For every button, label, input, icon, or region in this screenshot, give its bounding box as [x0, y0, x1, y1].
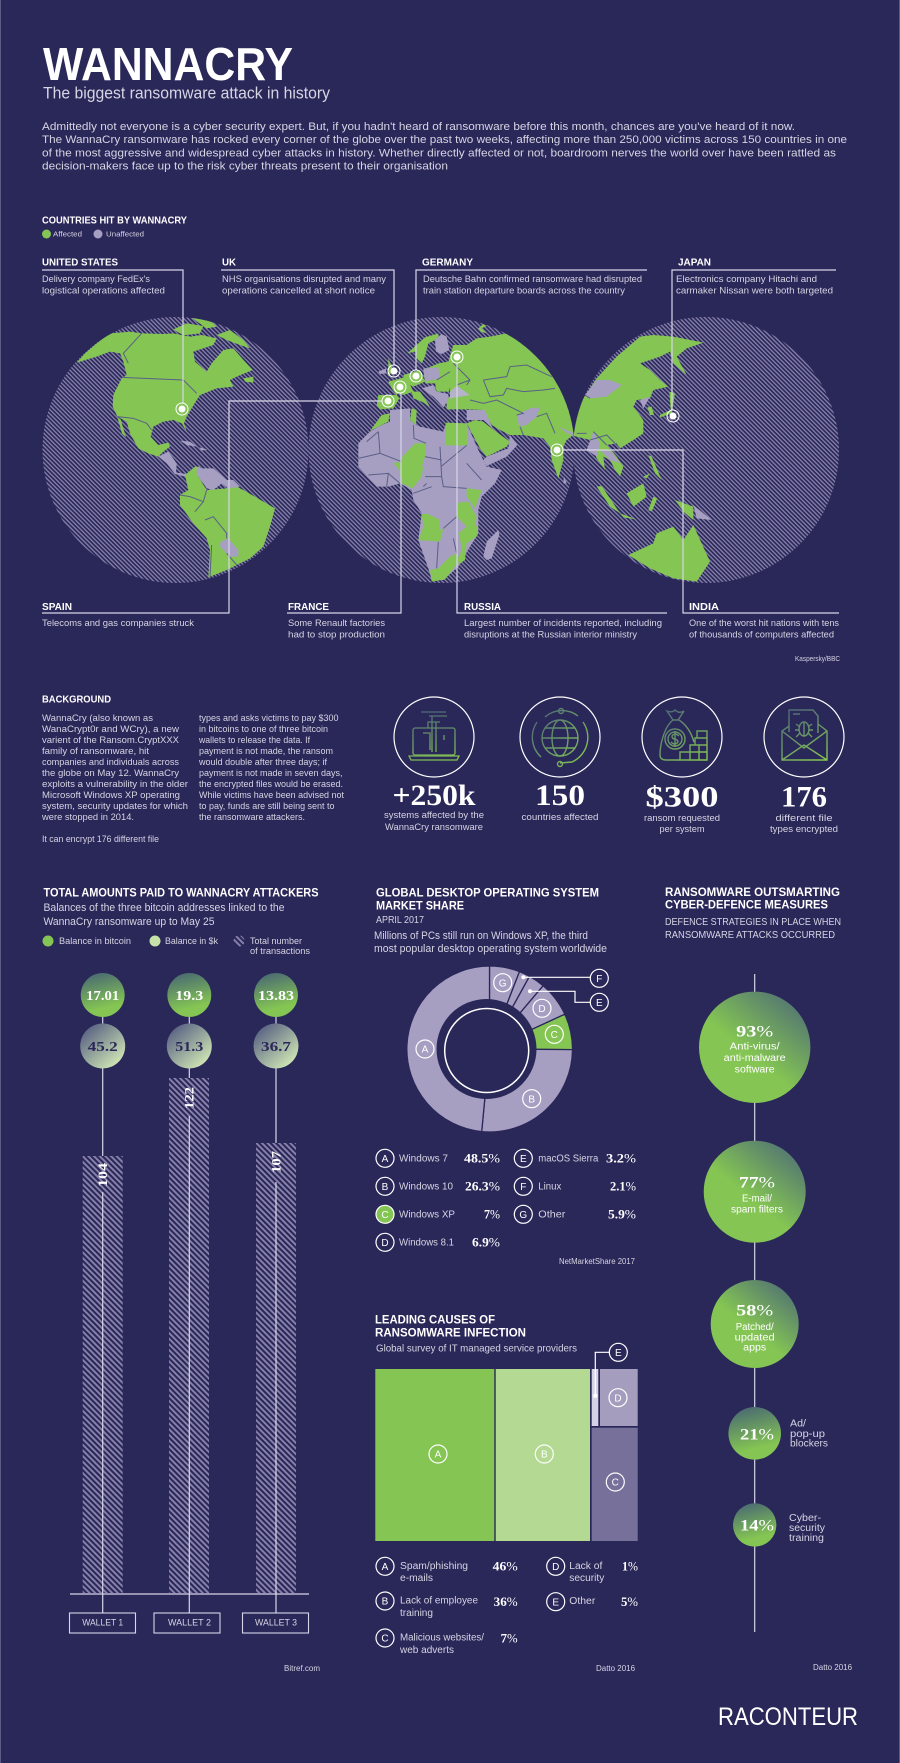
treemap chart: A	[435, 1450, 442, 1461]
donut legend: F	[520, 1182, 526, 1193]
heading: leading causes: RANSOMWARE INFECTION	[375, 1325, 526, 1339]
wallet legend: Total number	[250, 936, 302, 946]
background text column 2: While victims have been advised not	[199, 790, 344, 801]
callout: India: One of the worst hit nations with tens	[689, 618, 839, 629]
heading: OS market share: Millions of PCs still run on Windows XP, the third	[374, 930, 588, 942]
background text column 2: the ransomware attackers.	[199, 812, 305, 823]
background text column 1: Microsoft Windows XP operating	[42, 790, 180, 801]
treemap chart: D	[614, 1393, 622, 1404]
bubble: 58%	[711, 1280, 799, 1368]
chart: wallet 2: 122	[182, 1087, 197, 1109]
treemap legend: A	[382, 1562, 389, 1573]
map legend: Unaffected	[106, 230, 144, 239]
chart: wallet 3	[242, 973, 308, 1633]
intro text block: Admittedly not everyone is a cyber security expert. But, if you hadn't heard of ransomware before this month, chances are you've heard of it now.	[42, 121, 795, 133]
stat: file types: different file	[776, 813, 832, 824]
donut legend: Windows 10	[399, 1182, 453, 1192]
heading: total amounts paid: WannaCry ransomware up to May 25	[44, 916, 214, 928]
bubble: 14%: security	[789, 1523, 825, 1534]
icon: laptop	[409, 712, 459, 760]
background text column 1: family of ransomware, hit	[42, 746, 149, 757]
bubble: 77%: spam filters	[731, 1204, 783, 1216]
logo: RACONTEUR	[718, 1703, 858, 1731]
callout: Russia: RUSSIA	[464, 602, 501, 613]
bubble: 93%: 93 %	[736, 1024, 773, 1040]
donut legend: 7%	[484, 1208, 500, 1222]
donut legend: Windows 7	[399, 1154, 448, 1164]
stat: countries affected: 150	[535, 779, 585, 812]
map source: Kaspersky/BBC	[795, 654, 840, 663]
callout: Germany	[410, 258, 647, 382]
slice labels: E	[596, 998, 603, 1009]
stat: countries affected	[520, 697, 600, 823]
heading: leading causes	[375, 1312, 577, 1354]
treemap legend: D	[552, 1562, 559, 1573]
donut legend: 48.5%	[464, 1152, 500, 1166]
background text column 2: payment is not made, the ransom	[199, 746, 333, 757]
heading: outsmarting defences: DEFENCE STRATEGIES IN PLACE WHEN	[665, 916, 841, 928]
treemap legend: Spam/phishing	[400, 1561, 468, 1572]
treemap legend: security	[569, 1573, 604, 1584]
donut legend: 3.2%	[606, 1152, 636, 1166]
treemap chart	[375, 1343, 638, 1541]
chart: wallet 1	[70, 973, 136, 1633]
bubble: 14%: 14%	[740, 1518, 774, 1534]
callout: Russia: Largest number of incidents reported, including	[464, 618, 662, 629]
treemap legend: Lack of employee	[400, 1596, 478, 1606]
stat: systems affected	[384, 697, 484, 833]
treemap legend: E	[552, 1597, 559, 1608]
stat: file types: types encrypted	[770, 824, 838, 835]
stat: ransom requested: $300	[646, 780, 718, 814]
bubble: 77%	[704, 1141, 806, 1243]
bubble: 58%: updated	[735, 1332, 775, 1344]
treemap legend: C	[381, 1634, 389, 1645]
treemap legend: web adverts	[399, 1645, 454, 1656]
world map: Asia-Pacific hemisphere	[570, 317, 839, 583]
chart: wallet 2: 51.3	[175, 1040, 203, 1055]
donut legend: G	[519, 1210, 527, 1221]
callout: United States: logistical operations affected	[42, 286, 165, 296]
treemap source: Datto 2016	[596, 1664, 636, 1673]
slice labels: F	[596, 974, 602, 985]
heading: OS market share: MARKET SHARE	[376, 898, 464, 912]
stat: systems affected: +250k	[392, 779, 476, 812]
background text column 1: It can encrypt 176 different file	[42, 834, 159, 845]
bubble: 77%: 77%	[739, 1174, 775, 1192]
intro text block: The WannaCry ransomware has rocked every corner of the globe over the past two weeks, affecting more than 250,000 victims across 150 countries in one	[42, 134, 847, 146]
bubble: 21%: 21%	[740, 1426, 774, 1444]
background text column 1: varient of the Ransom.CryptXXX	[42, 735, 180, 746]
donut chart	[407, 966, 608, 1132]
title: WANNACRY	[43, 38, 293, 90]
bubble: 93%: anti-malware	[724, 1053, 786, 1064]
heading: total amounts paid	[44, 885, 318, 928]
callout: India: of thousands of computers affected	[689, 630, 834, 640]
donut legend	[376, 1149, 636, 1251]
callout: Germany: train station departure boards across the country	[423, 286, 625, 296]
treemap legend: Malicious websites/	[400, 1632, 484, 1644]
slice labels: D	[538, 1004, 546, 1015]
stat: ransom requested: per system	[660, 824, 705, 835]
donut source: NetMarketShare 2017	[559, 1257, 636, 1266]
treemap legend: 36%	[494, 1595, 518, 1609]
background text column 1: system, security updates for which	[42, 801, 188, 812]
background text column 1: were stopped in 2014.	[41, 812, 134, 823]
background text column 2: types and asks victims to pay $300	[199, 713, 338, 724]
donut legend: C	[381, 1210, 389, 1221]
donut legend: 26.3%	[465, 1180, 500, 1194]
heading: outsmarting defences: RANSOMWARE ATTACKS OCCURRED	[665, 929, 835, 941]
icon: envelope with bug	[782, 710, 827, 760]
treemap legend: 1%	[622, 1560, 638, 1574]
callout: Japan: carmaker Nissan were both targeted	[676, 286, 833, 296]
callout: Germany: GERMANY	[422, 258, 473, 268]
bubble: 21%: pop-up	[790, 1429, 825, 1440]
background text column 1	[41, 713, 188, 845]
subtitle: The biggest ransomware attack in history	[43, 84, 330, 102]
chart: wallet 1: 17.01	[86, 989, 119, 1004]
chart: wallet 2: WALLET 2	[168, 1618, 211, 1628]
stat: ransom requested	[642, 697, 722, 835]
treemap legend: 7%	[501, 1632, 518, 1646]
background text column 1: the globe on May 12. WannaCry	[42, 768, 179, 779]
heading: outsmarting defences	[665, 885, 841, 941]
callout: Japan: Electronics company Hitachi and	[676, 274, 817, 285]
chart: wallet 1: 104	[95, 1162, 110, 1187]
treemap legend: training	[400, 1608, 433, 1619]
icon: globe	[532, 708, 588, 766]
donut legend: Linux	[538, 1182, 561, 1192]
wallet legend: Balance in $k	[165, 936, 218, 946]
chart: wallet 3: 13.83	[258, 989, 294, 1004]
background text column 2: to pay, funds are still being sent to	[199, 801, 334, 812]
wallet chart source: Bitref.com	[284, 1664, 320, 1673]
callout: Japan	[667, 258, 836, 422]
chart: wallet 3: 36.7	[261, 1040, 291, 1055]
background text column 1: WanaCrypt0r and WCry), a new	[42, 724, 179, 735]
donut legend: B	[382, 1182, 389, 1193]
wallet legend: Balance in bitcoin	[59, 936, 131, 946]
treemap chart: C	[612, 1478, 619, 1489]
slice labels: B	[528, 1094, 535, 1105]
callout: Russia: disruptions at the Russian interior ministry	[464, 630, 637, 640]
treemap legend: 46%	[493, 1560, 518, 1574]
donut legend: A	[382, 1154, 389, 1165]
heading: total amounts paid: TOTAL AMOUNTS PAID TO WANNACRY ATTACKERS	[44, 885, 318, 899]
heading: outsmarting defences: CYBER-DEFENCE MEASURES	[665, 897, 828, 911]
background text column 2: would double after three days; if	[198, 757, 327, 768]
callout: France: Some Renault factories	[288, 618, 385, 629]
slice labels: C	[551, 1030, 558, 1041]
donut legend: E	[520, 1154, 527, 1165]
intro text block: decision-makers face up to the risk cyber threats present to their organisation	[42, 160, 448, 172]
callout: France: had to stop production	[288, 630, 385, 640]
treemap chart: E	[615, 1348, 622, 1359]
bubble: 93%: software	[735, 1064, 775, 1076]
bubble: 14%: Cyber-	[789, 1513, 821, 1524]
treemap chart: B	[541, 1450, 548, 1461]
donut legend: Windows XP	[399, 1210, 455, 1220]
stat: countries affected: countries affected	[522, 812, 598, 823]
callout: India	[551, 444, 839, 640]
stat: systems affected: WannaCry ransomware	[385, 822, 483, 833]
callout: UK: UK	[222, 258, 237, 268]
heading: leading causes: LEADING CAUSES OF	[375, 1312, 495, 1326]
map legend	[42, 230, 144, 239]
heading: OS market share: GLOBAL DESKTOP OPERATING SYSTEM	[376, 885, 599, 899]
callout: United States	[42, 258, 188, 415]
background text column 1: exploits a vulnerability in the older	[42, 779, 188, 790]
background text column 1: companies and individuals across	[42, 757, 179, 768]
donut legend: Other	[538, 1210, 566, 1220]
donut legend: 5.9%	[608, 1208, 636, 1222]
stat: file types	[764, 697, 844, 835]
heading: OS market share	[374, 885, 607, 955]
chart: wallet 3: 107	[268, 1150, 284, 1173]
chart: wallet 1: 45.2	[88, 1040, 118, 1055]
background text column 1: WannaCry (also known as	[42, 713, 153, 724]
callout: France: FRANCE	[288, 602, 329, 613]
callout: Spain: SPAIN	[42, 602, 72, 613]
bubble: 93%: Anti-virus/	[730, 1042, 780, 1052]
heading: OS market share: APRIL 2017	[376, 914, 424, 926]
callout: Spain: Telecoms and gas companies struck	[42, 618, 194, 629]
bubble: 14%	[733, 1503, 825, 1547]
background text column 2: payment is not made in seven days,	[199, 768, 342, 779]
bubble: 93%	[699, 992, 810, 1103]
heading: total amounts paid: Balances of the three bitcoin addresses linked to the	[44, 902, 284, 914]
intro text block: of the most aggressive and widespread cyber attacks in history. Whether directly affected or not, boardroom nerves the world over have been rattled as	[42, 147, 837, 159]
stat: file types: 176	[781, 780, 827, 814]
treemap legend: e-mails	[400, 1573, 433, 1584]
bubble: 58%: Patched/	[736, 1322, 774, 1333]
stat: ransom requested: ransom requested	[644, 813, 720, 824]
callout: Russia	[451, 351, 667, 640]
background text column 2: in bitcoins to one of three bitcoin	[199, 724, 328, 735]
heading: leading causes: Global survey of IT managed service providers	[376, 1342, 577, 1354]
world map: Europe and Africa hemisphere	[308, 317, 587, 583]
slice labels: A	[422, 1045, 429, 1056]
callout: Germany: Deutsche Bahn confirmed ransomware had disrupted	[423, 274, 642, 285]
heading: outsmarting defences: RANSOMWARE OUTSMARTING	[665, 885, 840, 899]
donut legend: D	[381, 1238, 389, 1249]
map legend: Affected	[53, 230, 82, 239]
background text column 2: the encrypted files would be erased.	[199, 779, 343, 790]
wallet legend	[42, 936, 311, 956]
bubble: 21%: Ad/	[790, 1418, 806, 1430]
bubble: 21%	[728, 1407, 828, 1460]
callout: Spain	[42, 395, 394, 629]
map heading: COUNTRIES HIT BY WANNACRY	[42, 216, 187, 226]
slice labels	[416, 969, 608, 1108]
donut legend: Windows 8.1	[399, 1238, 454, 1248]
callout: UK	[221, 258, 400, 377]
donut legend: macOS Sierra	[538, 1154, 599, 1164]
bubble: 58%: apps	[743, 1342, 766, 1354]
chart: wallet 2: 19.3	[175, 989, 203, 1004]
wallet legend: of transactions	[250, 946, 311, 956]
background text column 2	[198, 713, 344, 823]
callout: India: INDIA	[689, 602, 719, 613]
bubble: 58%: 58 %	[736, 1302, 773, 1320]
background heading: BACKGROUND	[42, 694, 111, 706]
chart: wallet 2	[154, 973, 220, 1633]
treemap legend: 5%	[621, 1595, 638, 1609]
bubble: 21%: blockers	[790, 1438, 828, 1450]
callout: France	[287, 381, 406, 640]
callout: United States: Delivery company FedEx's	[42, 274, 150, 285]
intro text block	[42, 121, 847, 172]
donut legend: 2.1%	[610, 1180, 636, 1194]
bubble: 14%: training	[789, 1533, 824, 1544]
donut legend: 6.9%	[472, 1236, 500, 1250]
background text column 2: wallets to release the data. If	[198, 735, 310, 746]
treemap legend: Lack of	[569, 1561, 603, 1572]
chart: wallet 3: WALLET 3	[255, 1618, 297, 1628]
chart: wallet 1: WALLET 1	[82, 1618, 123, 1628]
callout: UK: operations cancelled at short notice	[222, 286, 375, 296]
stat: systems affected: systems affected by the	[384, 810, 484, 821]
treemap legend	[376, 1557, 638, 1656]
callout: UK: NHS organisations disrupted and many	[222, 274, 386, 285]
treemap legend: B	[382, 1597, 389, 1608]
treemap legend: Other	[569, 1596, 596, 1607]
bubbles source: Datto 2016	[813, 1663, 853, 1672]
heading: OS market share: most popular desktop operating system worldwide	[374, 943, 607, 955]
callout: Japan: JAPAN	[678, 258, 711, 268]
bubble: 77%: E-mail/	[742, 1194, 772, 1204]
icon: money bag	[660, 710, 707, 760]
world map: Americas hemisphere	[42, 317, 308, 583]
callout: United States: UNITED STATES	[42, 258, 118, 268]
slice labels: G	[499, 978, 507, 989]
